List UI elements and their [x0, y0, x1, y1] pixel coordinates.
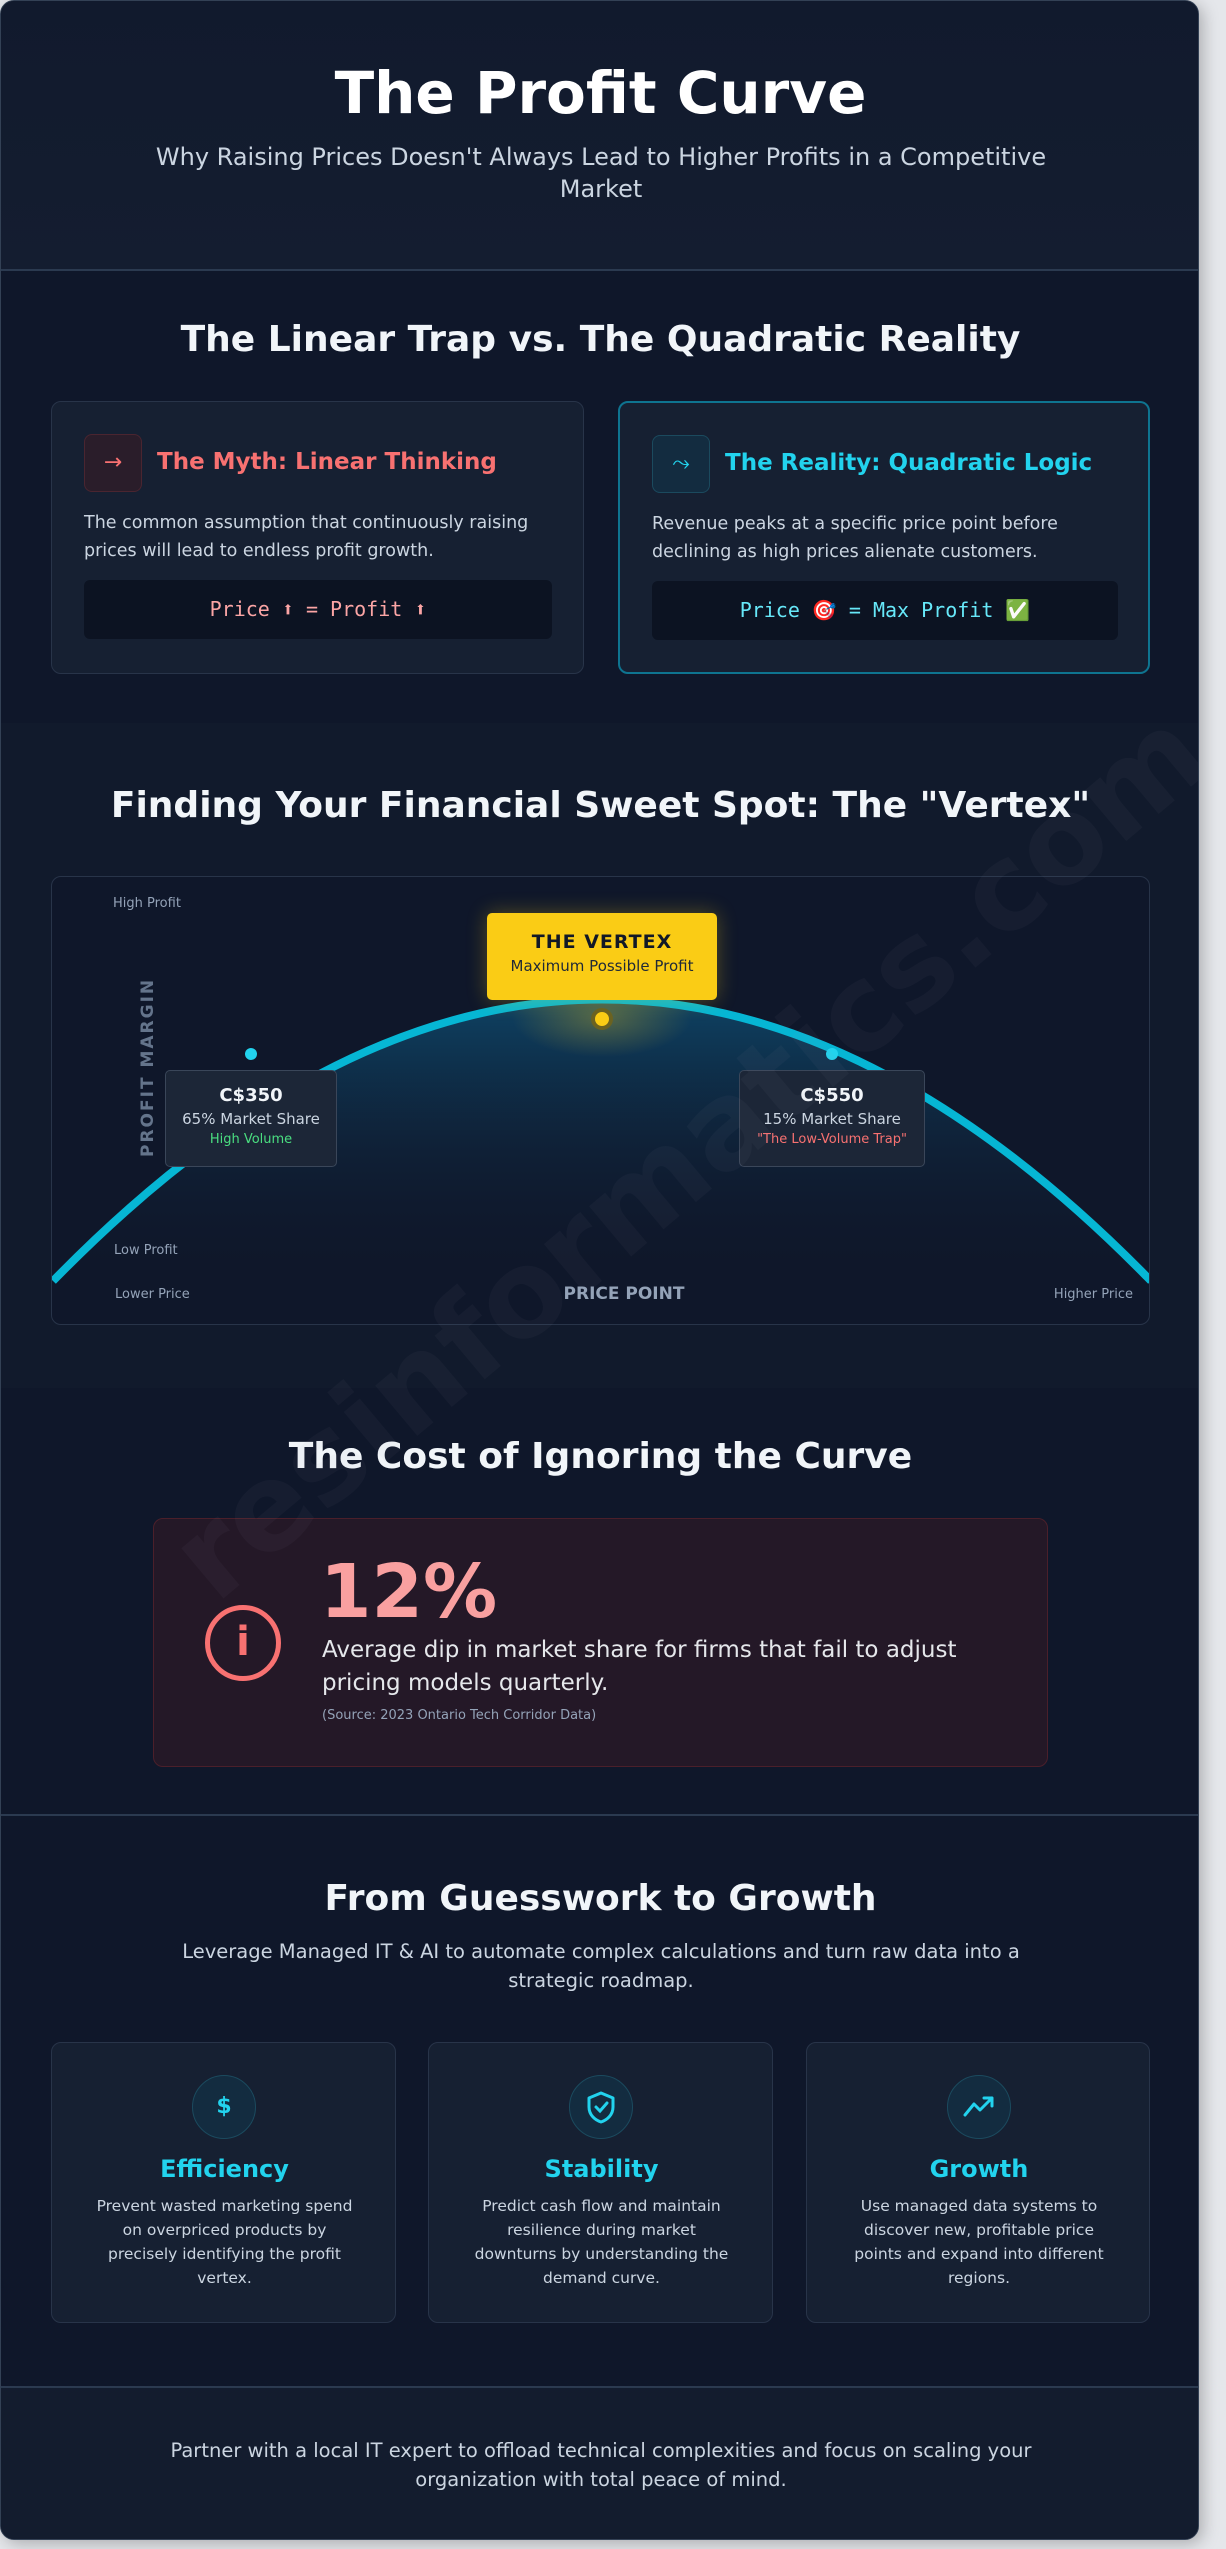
- title: Efficiency: [160, 2155, 289, 2183]
- callout: C$550: [739, 1070, 925, 1167]
- callout: C$350: High Volume: [210, 1132, 292, 1147]
- icon: curve: ⤳: [672, 451, 690, 476]
- reality title: The Reality: Quadratic Logic: [725, 450, 1092, 476]
- title: Stability: [545, 2155, 658, 2183]
- icon: arrow: [84, 434, 142, 492]
- myth formula: Price ⬆ = Profit ⬆: [210, 597, 426, 621]
- icon: shield: [569, 2075, 633, 2139]
- heading: Finding Your Financial Sweet Spot: The "Vertex": [111, 785, 1090, 826]
- myth text: The common assumption that continuously raising prices will lead to endless profit growth.: [84, 513, 528, 561]
- stat text: Average dip in market share for firms that fail to adjust pricing models quarterly.: [322, 1637, 956, 1696]
- panel: efficiency: [51, 2042, 396, 2323]
- reality text: Revenue peaks at a specific price point before declining as high prices alienate customers.: [652, 514, 1058, 562]
- callout: C$550: 15% Market Share: [763, 1110, 901, 1128]
- callout: C$550: C$550: [800, 1085, 864, 1106]
- footer: [1, 2388, 1200, 2541]
- text: Use managed data systems to discover new, profitable price points and expand into different regions.: [854, 2197, 1104, 2287]
- icon: arrow: →: [104, 450, 122, 475]
- x axis title: PRICE POINT: [564, 1284, 684, 1304]
- text: Prevent wasted marketing spend on overpriced products by precisely identifying the profit vertex.: [97, 2197, 352, 2287]
- x axis label lower: Lower Price: [115, 1287, 190, 1302]
- vertex dot: [591, 1008, 613, 1030]
- panel: myth: [51, 401, 584, 674]
- heading: The Linear Trap vs. The Quadratic Reality: [181, 319, 1020, 360]
- subtitle: Leverage Managed IT & AI to automate complex calculations and turn raw data into a strategic roadmap.: [182, 1940, 1020, 1992]
- myth formula: [84, 580, 552, 639]
- source: (Source: 2023 Ontario Tech Corridor Data): [322, 1708, 596, 1723]
- header: [1, 1, 1200, 271]
- reality formula: [652, 581, 1118, 640]
- myth title: The Myth: Linear Thinking: [157, 449, 497, 475]
- text: Predict cash flow and maintain resilience during market downturns by understanding the demand curve.: [475, 2197, 728, 2287]
- x axis label higher: Higher Price: [1054, 1287, 1133, 1302]
- axis label high: High Profit: [113, 896, 181, 911]
- callout: vertex: Maximum Possible Profit: [510, 957, 693, 975]
- icon: info: i: [236, 1619, 250, 1665]
- title: Growth: [930, 2155, 1028, 2183]
- dot left: [245, 1048, 257, 1060]
- callout: C$550: "The Low-Volume Trap": [757, 1132, 907, 1147]
- icon: curve: [652, 435, 710, 493]
- callout: C$350: [165, 1070, 337, 1167]
- y axis label: PROFIT MARGIN: [138, 978, 158, 1157]
- subtitle: Why Raising Prices Doesn't Always Lead to Higher Profits in a Competitive Market: [156, 143, 1046, 203]
- section: cost: [1, 1388, 1200, 1816]
- callout: C$350: C$350: [219, 1085, 283, 1106]
- section: linear vs quadratic: [1, 271, 1200, 723]
- callout: vertex: THE VERTEX: [532, 931, 672, 953]
- footer text: Partner with a local IT expert to offload technical complexities and focus on scaling your organization with total peace of mind.: [170, 2439, 1032, 2491]
- title: The Profit Curve: [335, 59, 866, 127]
- callout: C$350: 65% Market Share: [182, 1110, 320, 1128]
- heading: The Cost of Ignoring the Curve: [289, 1436, 912, 1477]
- dot right: [826, 1048, 838, 1060]
- section: vertex chart: [1, 723, 1200, 1388]
- curve: [53, 1000, 1151, 1281]
- panel: stability: [428, 2042, 773, 2323]
- reality formula: Price 🎯 = Max Profit ✅: [740, 598, 1030, 622]
- icon: trend: [947, 2075, 1011, 2139]
- stat callout: [153, 1518, 1048, 1767]
- icon: dollar: [192, 2075, 256, 2139]
- stat number: 12%: [320, 1549, 497, 1635]
- icon: info: [205, 1605, 281, 1681]
- callout: vertex: [487, 913, 717, 1000]
- icon: dollar: $: [216, 2094, 232, 2119]
- axis label low: Low Profit: [114, 1243, 178, 1258]
- panel: growth: [806, 2042, 1150, 2323]
- panel: reality: [618, 401, 1150, 674]
- section: growth: [1, 1816, 1200, 2388]
- heading: From Guesswork to Growth: [324, 1878, 877, 1919]
- chart: [51, 876, 1150, 1325]
